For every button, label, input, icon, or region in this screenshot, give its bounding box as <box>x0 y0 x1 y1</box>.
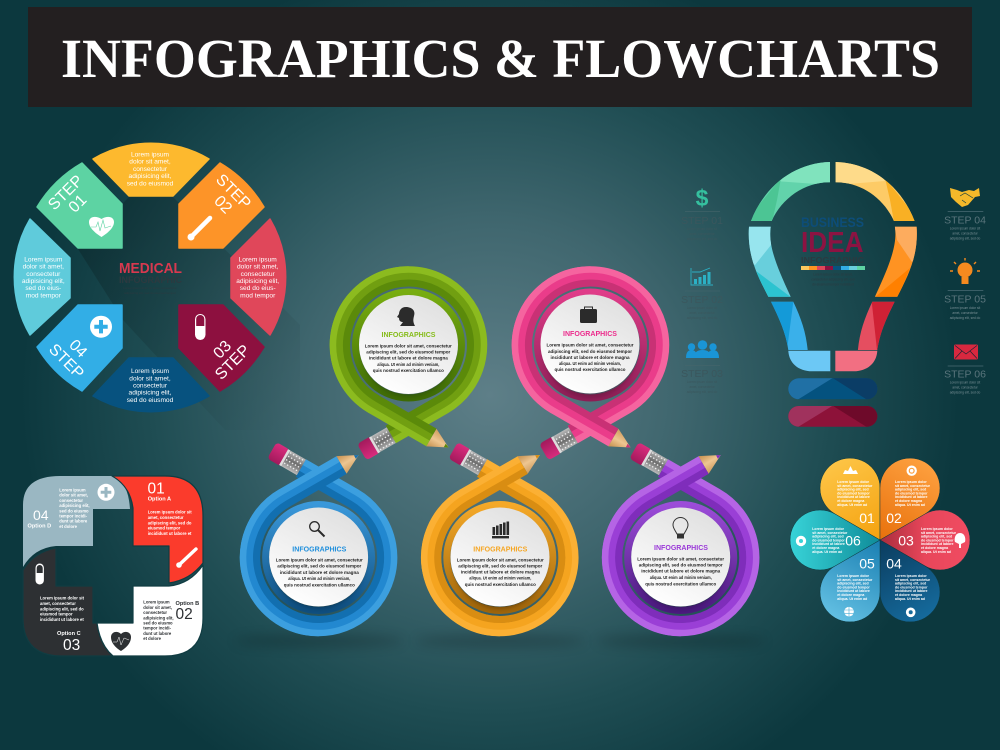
segment: grey 04: et dolore <box>59 524 78 529</box>
step 01: adipiscing elit, sed do <box>687 237 717 241</box>
petal texts: et dolore magna <box>812 546 839 550</box>
segment: red right: consectetur <box>241 271 276 278</box>
icon: pill <box>36 564 44 584</box>
segment: cyan left: consectetur <box>26 271 61 278</box>
petal texts: Lorem ipsum dolor <box>837 574 870 578</box>
segment: green step 01: STEP <box>45 172 87 214</box>
panel: purple pencil loop: incididunt ut labore et dolore magna <box>641 569 720 575</box>
segment: red 01: amet, consectetur <box>148 515 184 520</box>
step 02: amet, consectetur <box>689 311 716 315</box>
step 04 <box>944 188 986 240</box>
panel: blue pencil loop: adipiscing elit, sed do eiusmod tempor <box>277 564 361 570</box>
panel: pink pencil loop: quis nostrud exercitation ullamco <box>554 367 626 373</box>
step 06: amet, consectetur <box>952 386 979 390</box>
petal texts: adipiscing elit, sed <box>895 488 926 492</box>
medical heading: INFOGRAPHIC <box>119 275 183 285</box>
segment: white 02: adipisicing elit, <box>143 615 174 620</box>
icon: briefcase <box>580 307 597 323</box>
segment: dark 03: 03 <box>63 637 80 654</box>
step 01: $ <box>696 185 709 211</box>
segment: dark 03: incididunt ut labore et <box>40 617 84 622</box>
panel: business idea bulb <box>745 158 922 428</box>
medical heading: adipisicing elit, sed do eiusmod tempor <box>124 291 176 295</box>
step 03: STEP 03 <box>681 368 723 380</box>
segment: cyan left: adipisicing elit, <box>22 278 65 285</box>
segment: grey 04: consectetur <box>59 498 83 503</box>
step 03 <box>681 340 723 394</box>
bulb heading: do eiusmod tempor incididunt <box>812 282 854 286</box>
petal numbers <box>845 510 914 572</box>
segment: grey 04: 04 <box>33 507 49 523</box>
segment: dark blue bottom: sed do eiusmod <box>127 397 174 404</box>
segment: dark blue bottom: Lorem ipsum <box>131 368 170 375</box>
petal numbers: 04 <box>886 556 902 572</box>
segment: white 02: Option B <box>176 601 199 607</box>
panel: orange pencil loop: quis nostrud exercitation ullamco <box>465 582 536 588</box>
petal texts: adipiscing elit, sed <box>837 582 869 586</box>
segment: dark 03: adipiscing elit, sed do <box>40 606 84 611</box>
segment: white 02 <box>97 565 203 656</box>
step 03: adipiscing elit, sed do <box>687 390 717 394</box>
icon: magnifier <box>310 522 324 536</box>
segment: yellow top <box>93 143 209 196</box>
segment: blue step 04: STEP <box>45 341 87 382</box>
petal texts: incididunt ut labore <box>921 542 954 546</box>
petal texts: aliqua. Ut enim ad <box>921 550 951 554</box>
segment: dark blue bottom: consectetur <box>133 382 168 390</box>
step 05: adipiscing elit, sed do <box>950 316 980 320</box>
bulb heading: INFOGRAPHIC <box>801 255 864 265</box>
icon: pill <box>195 314 206 340</box>
petal texts: aliqua. Ut enim ad <box>812 550 842 554</box>
petal numbers: 05 <box>859 556 875 572</box>
medical heading <box>119 260 183 295</box>
icon: head <box>397 307 415 326</box>
step 05: Lorem ipsum dolor sit <box>950 306 980 310</box>
segment: red right: Lorem ipsum <box>239 256 277 263</box>
petal texts: do eiusmod tempor <box>837 491 870 495</box>
panel: pink pencil loop: INFOGRAPHICS <box>563 331 617 338</box>
panel: purple pencil loop: aliqua. Ut enim ad minim veniam, <box>650 575 712 581</box>
segment: cyan left: dolor sit amet, <box>23 264 64 271</box>
segment: white 02: tempor incidi- <box>143 626 172 631</box>
step 04: amet, consectetur <box>952 232 979 236</box>
title banner: INFOGRAPHICS & FLOWCHARTS <box>61 28 940 89</box>
step 03: amet, consectetur <box>689 385 716 389</box>
bulb heading: IDEA <box>801 227 864 259</box>
segment: white 02: dunt ut labore <box>143 631 172 636</box>
segment: green step 01 <box>37 163 122 248</box>
icon: thermometer <box>176 549 196 568</box>
petal texts: Lorem ipsum dolor <box>895 480 927 484</box>
segment: dark 03: Option C <box>57 631 81 637</box>
segment: grey 04: adipisicing elit, <box>59 503 90 508</box>
segment: red 01: Option A <box>148 496 171 502</box>
petal texts: Lorem ipsum dolor <box>837 480 870 484</box>
petal texts: adipiscing elit, sed <box>895 582 926 586</box>
petal texts: sit amet, consectetur <box>837 578 873 582</box>
segment: blue step 04 <box>37 305 122 391</box>
step 01 <box>681 185 723 241</box>
step 05 <box>944 258 986 320</box>
icon: light bulb <box>673 518 688 538</box>
petal texts: sit amet, consectetur <box>895 578 931 582</box>
segment: white 02: consectetur <box>143 610 167 615</box>
panel: green pencil loop <box>333 270 484 460</box>
petal texts: do eiusmod tempor <box>837 585 870 589</box>
segment: red 01: incididunt ut labore et <box>148 531 192 536</box>
segment: dark 03: eiusmod tempor <box>40 612 73 617</box>
segment: dark 03: Lorem ipsum dolor sit <box>40 596 85 601</box>
segment: grey 04: dunt ut labore <box>59 519 88 524</box>
petal numbers: 01 <box>859 510 875 526</box>
segment: orange step 02: STEP <box>212 171 254 213</box>
segment: dark blue bottom: dolor sit amet, <box>129 375 171 382</box>
petal texts: aliqua. Ut enim ad <box>895 503 925 507</box>
panel: medical step wheel <box>14 143 300 430</box>
petal texts: incididunt ut labore <box>837 495 870 499</box>
segment: white 02: 02 <box>176 606 193 623</box>
icon: thermometer <box>188 218 210 240</box>
petal texts: incididunt ut labore <box>812 542 845 546</box>
segment: yellow top: dolor sit amet, <box>129 159 171 166</box>
segment: grey 04: sed do eiusmo <box>59 508 89 513</box>
segment: dark 03 <box>23 548 113 656</box>
segment: cyan left: Lorem ipsum <box>24 256 63 263</box>
petal icons <box>796 466 965 617</box>
step 06 <box>944 344 986 394</box>
petal texts: Lorem ipsum dolor <box>812 527 845 531</box>
panel: blue pencil loop: incididunt ut labore et dolore magna <box>280 570 359 576</box>
segment: orange step 02: 02 <box>210 193 235 217</box>
segment: grey 04: tempor incidi- <box>59 514 88 518</box>
panel: green pencil loop: quis nostrud exercitation ullamco <box>373 368 444 374</box>
segment: white 02: dolor sit amet, <box>143 605 172 610</box>
step 05: amet, consectetur <box>952 311 979 315</box>
legend: steps 01-03 <box>681 185 723 394</box>
petal texts: sit amet, consectetur <box>837 484 873 488</box>
petal texts: Lorem ipsum dolor <box>921 527 953 531</box>
segment: orange step 02 <box>179 163 264 248</box>
title banner <box>28 7 972 107</box>
segment: dark blue bottom: adipisicing elit, <box>129 390 172 397</box>
panel: green pencil loop: aliqua. Ut enim ad minim veniam, <box>377 362 440 368</box>
petal texts: do eiusmod tempor <box>895 491 928 495</box>
panel: green pencil loop: INFOGRAPHICS <box>382 332 436 339</box>
bulb segments <box>745 158 922 371</box>
panel: purple pencil loop: adipiscing elit, sed do eiusmod tempor <box>639 563 723 569</box>
medical heading: Lorem ipsum dolor sit amet, consectetur <box>123 286 177 290</box>
step 02: adipiscing elit, sed do <box>687 316 717 320</box>
segment: red right <box>231 219 286 335</box>
segment: red 01: 01 <box>148 480 165 498</box>
petal texts: et dolore magna <box>837 499 864 503</box>
panel: pink pencil loop: incididunt ut labore et dolore magna <box>550 355 630 361</box>
panel: orange pencil loop: Lorem ipsum dolor sit amet, consectetur <box>457 557 544 563</box>
step 03: Lorem ipsum dolor sit <box>687 380 717 384</box>
petal numbers: 02 <box>886 510 902 526</box>
petal texts: do eiusmod tempor <box>895 585 928 589</box>
step 05: STEP 05 <box>944 294 986 306</box>
segment: red right: mod tempor <box>240 292 276 299</box>
segment: white 02: et dolore <box>143 636 162 641</box>
segment: blue step 04: 04 <box>65 337 90 361</box>
panel: orange pencil loop: adipiscing elit, sed do eiusmod tempor <box>458 563 542 569</box>
icon: bar chart <box>492 522 509 538</box>
segment: green step 01: 01 <box>66 192 90 216</box>
panel: blue pencil loop <box>234 442 404 647</box>
petal texts: do eiusmod tempor <box>921 538 954 542</box>
step 04: adipiscing elit, sed do <box>950 236 980 240</box>
panel: green pencil loop: Lorem ipsum dolor sit amet, consectetur <box>365 344 452 350</box>
step 01: Lorem ipsum dolor sit <box>687 227 717 231</box>
segment: grey 04: Option D <box>28 524 51 530</box>
step 02: STEP 02 <box>681 294 723 306</box>
petal texts: incididunt ut labore <box>837 589 870 593</box>
petal texts: adipiscing elit, sed <box>837 488 869 492</box>
panel: blue pencil loop: aliqua. Ut enim ad minim veniam, <box>288 576 351 582</box>
segment: red 01: Lorem ipsum dolor sit <box>148 510 192 515</box>
segment: grey 04 <box>23 476 130 567</box>
petal texts: adipiscing elit, sed <box>812 535 844 539</box>
segment: cyan left <box>14 219 70 335</box>
petal texts: sit amet, consectetur <box>812 531 848 535</box>
panel: blue pencil loop: INFOGRAPHICS <box>292 547 347 554</box>
segment: yellow top: sed do eiusmod <box>127 180 174 188</box>
panel: purple pencil loop <box>596 442 766 647</box>
segment: white 02: sed do eiusmo <box>143 620 173 626</box>
panel: pink pencil loop: Lorem ipsum dolor sit amet, consectetur <box>546 343 634 349</box>
panel: orange pencil loop <box>415 442 585 647</box>
petal texts: sit amet, consectetur <box>921 531 957 535</box>
panel: cross options chart <box>23 476 203 656</box>
legend: steps 04-06 <box>944 188 986 394</box>
step 06: Lorem ipsum dolor sit <box>950 380 980 384</box>
panel: purple pencil loop: Lorem ipsum dolor sit amet, consectetur <box>637 557 724 563</box>
segment: maroon step 03 <box>179 305 264 391</box>
panel: purple pencil loop: quis nostrud exercitation ullamco <box>645 581 716 587</box>
panel: purple pencil loop: INFOGRAPHICS <box>654 545 708 552</box>
step 01: amet, consectetur <box>689 232 716 236</box>
bulb heading <box>801 214 865 286</box>
segment: red right: sed do eius- <box>240 285 276 292</box>
petal numbers: 03 <box>898 532 914 548</box>
icon: plus <box>90 316 112 338</box>
petal texts: sit amet, consectetur <box>895 484 931 488</box>
icon: plus <box>98 484 114 501</box>
segment: white 02: Lorem ipsum <box>143 600 170 605</box>
medical heading: MEDICAL <box>119 260 182 277</box>
bulb heading: Lorem ipsum dolor sit amet, <box>813 272 853 276</box>
step 04: STEP 04 <box>944 214 986 226</box>
icon: heart <box>111 632 131 651</box>
segment: yellow top: Lorem ipsum <box>131 152 170 158</box>
segment: red 01 <box>112 476 203 583</box>
step 02: Lorem ipsum dolor sit <box>687 306 717 310</box>
segment: red 01: adipiscing elit, sed do <box>148 520 192 525</box>
petal texts: aliqua. Ut enim ad <box>895 597 925 601</box>
segment: cyan left: mod tempor <box>26 292 62 299</box>
panel: orange pencil loop: incididunt ut labore et dolore magna <box>461 570 540 576</box>
step 01: STEP 01 <box>681 215 723 227</box>
petal numbers: 06 <box>845 532 861 548</box>
petal texts: aliqua. Ut enim ad <box>837 597 867 601</box>
step 06: STEP 06 <box>944 368 986 380</box>
segment: red right: adipisicing elit, <box>236 278 279 285</box>
segment: maroon step 03: 03 <box>210 338 235 362</box>
petal texts: incididunt ut labore <box>895 495 928 499</box>
bulb base pills <box>788 378 878 428</box>
bulb heading: consectetur adipiscing elit, sed <box>811 278 855 282</box>
petals <box>790 447 970 633</box>
panel: six petal flower <box>790 447 970 633</box>
petal texts: et dolore magna <box>837 593 864 597</box>
icon: heart <box>89 217 114 237</box>
petal texts: et dolore magna <box>895 593 922 597</box>
segment: red 01: eiusmod tempor <box>148 526 181 531</box>
panel: pink pencil loop: aliqua. Ut enim ad minim veniam, <box>559 361 622 367</box>
segment: yellow top: consectetur <box>133 166 168 173</box>
bulb heading: BUSINESS <box>801 214 864 230</box>
segment: cyan left: sed do eius- <box>25 285 61 292</box>
petal texts: adipiscing elit, sed <box>921 535 952 539</box>
panel: pink pencil loop <box>515 270 666 460</box>
petal texts: et dolore magna <box>895 499 922 503</box>
long shadow <box>78 197 300 430</box>
panel: pink pencil loop: adipiscing elit, sed do eiusmod tempor <box>548 349 632 355</box>
segment: dark blue bottom <box>93 358 209 412</box>
panel: orange pencil loop: aliqua. Ut enim ad minim veniam, <box>469 576 532 582</box>
segment: yellow top: adipisicing elit, <box>129 173 172 180</box>
petal texts: et dolore magna <box>921 546 948 550</box>
step 04: Lorem ipsum dolor sit <box>950 226 980 230</box>
step 06: adipiscing elit, sed do <box>950 390 980 394</box>
panel: blue pencil loop: quis nostrud exercitation ullamco <box>284 582 355 588</box>
segment: dark 03: amet, consectetur <box>40 601 76 606</box>
petal texts: aliqua. Ut enim ad <box>837 503 867 507</box>
petal texts <box>812 480 957 601</box>
segment: grey 04: dolor sit amet, <box>59 493 88 498</box>
panel: orange pencil loop: INFOGRAPHICS <box>473 546 528 553</box>
petal texts: incididunt ut labore <box>895 589 928 593</box>
panel: blue pencil loop: Lorem ipsum dolor sit amet, consectetur <box>276 558 363 564</box>
segment: maroon step 03: STEP <box>212 342 254 383</box>
petal texts: Lorem ipsum dolor <box>895 574 927 578</box>
segment: red right: dolor sit amet, <box>237 264 279 271</box>
petal texts: do eiusmod tempor <box>812 538 845 542</box>
panel: green pencil loop: incididunt ut labore et dolore magna <box>369 356 448 362</box>
segment: grey 04: Lorem ipsum <box>59 488 86 492</box>
step 02 <box>681 268 723 320</box>
panel: green pencil loop: adipiscing elit, sed do eiusmod tempor <box>366 350 450 356</box>
